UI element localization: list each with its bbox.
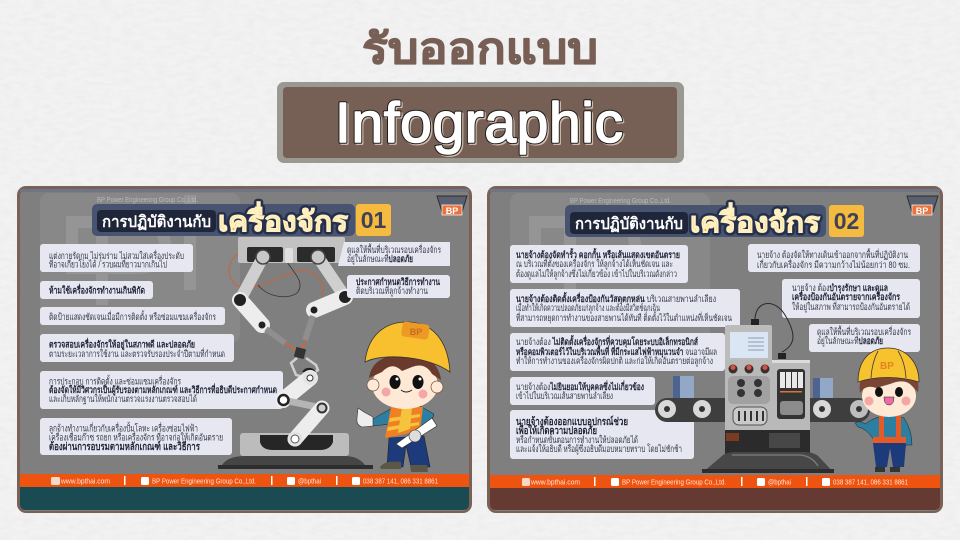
card: safety device design: หรือกำหนดขั้นตอนการทำงานให้ปลอดภัยได้ [516, 432, 638, 445]
card: work area [809, 324, 920, 352]
title bar [565, 202, 864, 238]
card: work method [347, 275, 450, 298]
card: safety device design: และแจ้งให้อธิบดี หรือผู้ซึ่งอธิบดีมอบหมายทราบ โดยไม่ชักช้า [516, 442, 682, 455]
card: electronics [510, 333, 725, 371]
banner: Infographic: Infographic [336, 92, 626, 156]
card: overload [40, 281, 153, 299]
company name: BP Power Engineering Group Co.,Ltd. [97, 197, 198, 204]
card: work area: อยู่ในลักษณะที่ปลอดภัย [817, 334, 883, 347]
card: unauthorised persons: นายจ้างต้องไม่ยินยอมให้บุคคลซึ่งไม่เกี่ยวข้อง [516, 380, 644, 393]
card: installation: การประกอบ การติดตั้ง และซ่อมแซมเครื่องจักร [49, 374, 181, 386]
card: maintenance: เครื่องป้องกันอันตรายจากเครื่องจักร [792, 290, 900, 302]
company name: BP Power Engineering Group Co.,Ltd. [570, 198, 671, 205]
robot arm [218, 237, 373, 469]
footer contact bar 02 [490, 475, 940, 510]
card: unauthorised persons: เข้าไปในบริเวณเส้นสายพานลำเลียง [516, 391, 613, 401]
character: engineer with blueprint: BP [410, 327, 422, 337]
card: maintenance [782, 279, 920, 318]
panel: machine safety 01 [17, 186, 472, 513]
title bar: เครื่องจักร [690, 202, 820, 238]
card: falling material [510, 289, 740, 327]
card: safety device design [510, 410, 694, 459]
logo BP [437, 196, 467, 216]
card: maintenance: นายจ้าง ต้องบำรุงรักษา และดูแล [792, 283, 888, 294]
footer contact bar 02: @bpthai [768, 478, 791, 486]
card: walkway: นายจ้าง ต้องจัดให้ทางเดินเข้าออกจากพื้นที่ปฏิบัติงาน [757, 247, 909, 260]
card: barriers: ต้องดูแลไม่ให้ลูกจ้างซึ่งไม่เกี่ยวข้อง เข้าไปในบริเวณดังกล่าว [516, 267, 677, 280]
footer contact bar 02: 038 387 141, 086 331 8861 [833, 478, 908, 486]
footer contact bar 01: www.bpthai.com [60, 476, 110, 486]
card: signage [40, 307, 225, 325]
title bar: การปฏิบัติงานกับ [102, 213, 211, 231]
card: barriers: นายจ้างต้องจัดทำรั้ว คอกกั้น หรือเส้นแสดงเขตอันตราย [516, 247, 680, 260]
card: installation: ต้องจัดให้มีวิศวกรเป็นผู้รับรองตามหลักเกณฑ์ และวิธีการที่อธิบดีประกาศกำหนด [49, 383, 277, 396]
footer contact bar 02: www.bpthai.com [530, 478, 580, 486]
title bar: 02 [834, 208, 859, 234]
banner: Infographic: Infographic [335, 91, 625, 155]
card: falling material: นายจ้างต้องติดตั้งเครื่องป้องกันวัสดุตกหล่น บริเวณสายพานลำเลียง [516, 291, 716, 305]
logo BP: BP [916, 206, 928, 216]
panel: machine safety 02 [487, 186, 943, 513]
watermark logo [510, 193, 710, 343]
footer contact bar 01 [20, 474, 469, 510]
card: work method: ประกาศกำหนดวิธีการทำงาน [356, 276, 441, 287]
watermark logo [40, 193, 240, 343]
card: training: ต้องผ่านการอบรมตามหลักเกณฑ์ และวิธีการ [49, 440, 200, 453]
title bar: 01 [361, 207, 386, 233]
title bar [92, 201, 391, 237]
card: inspection: ตรวจสอบเครื่องจักรให้อยู่ในสภาพดี และปลอดภัย [49, 338, 195, 350]
card: unauthorised persons [510, 377, 655, 405]
card: barriers: ณ บริเวณที่ตั้งของเครื่องจักร ให้ลูกจ้างได้เห็นชัดเจน และ [516, 256, 673, 270]
card: installation [40, 371, 283, 409]
footer contact bar 02: BP Power Engineering Group Co.,Ltd. [622, 478, 726, 486]
card: work area: อยู่ในลักษณะที่ปลอดภัย [347, 252, 413, 265]
card: clothing [40, 244, 193, 272]
title bar: เครื่องจักร [218, 201, 348, 237]
card: electronics: หรือคอมพิวเตอร์ไว้ในบริเวณพื้นที่ ที่มีกระแสไฟฟ้าหมุนวนจำ จนอาจมีผล [516, 344, 717, 358]
footer contact bar 01: BP Power Engineering Group Co.,Ltd. [152, 476, 256, 486]
title bar: เครื่องจักร [218, 201, 348, 237]
card: safety device design: เพื่อให้เกิดความปลอดภัย [516, 422, 597, 437]
card: work area [338, 242, 450, 266]
footer contact bar 01: 038 387 141, 086 331 8861 [363, 476, 438, 486]
banner: Infographic [277, 82, 684, 163]
character: engineer waving: BP [880, 361, 894, 372]
title bar: เครื่องจักร [690, 202, 820, 238]
card: work area: ดูแลให้พื้นที่บริเวณรอบเครื่องจักร [817, 324, 911, 338]
footer contact bar 01: @bpthai [298, 476, 321, 486]
logo BP [907, 196, 938, 216]
card: signage: ติดป้ายแสดงชัดเจนเมื่อมีการติดตั้ง หรือซ่อมแซมเครื่องจักร [49, 309, 216, 322]
character: engineer with blueprint [357, 321, 450, 472]
logo BP: BP [446, 206, 458, 216]
card: inspection: ตามระยะเวลาการใช้งาน และตรวจรับรองประจำปีตามที่กำหนด [49, 347, 225, 359]
card: work area: ดูแลให้พื้นที่บริเวณรอบเครื่องจักร [347, 242, 441, 256]
card: training: ลูกจ้างทำงานเกี่ยวกับเครื่องปั้มโลหะ เครื่องซ่อมไฟฟ้า [49, 420, 198, 434]
title bar: การปฏิบัติงานกับ [575, 215, 683, 233]
card: work method: ติดบริเวณที่ลูกจ้างทำงาน [356, 284, 429, 297]
card: falling material: เมื่อทำให้เกิดความปลอดภัยแก่ลูกจ้าง และต้องมีสวิตช์ฉุกเฉิน [516, 301, 660, 314]
character: engineer waving [855, 348, 919, 472]
card: electronics: ทำให้การทำงานของเครื่องจักรผิดปกติ และก่อให้เกิดอันตรายต่อลูกจ้าง [516, 354, 713, 367]
banner: Infographic: Infographic [335, 91, 625, 155]
card: electronics: นายจ้างต้อง ไม่ติดตั้งเครื่องจักรที่ควบคุมโดยระบบอิเล็กทรอนิกส์ [516, 334, 698, 348]
card: installation: และเก็บหลักฐานให้พนักงานตรวจแรงงานตรวจสอบได้ [49, 392, 197, 405]
card: inspection [40, 334, 234, 362]
card: walkway: เกี่ยวกับเครื่องจักร มีความกว้างไม่น้อยกว่า 80 ซม. [757, 258, 910, 270]
card: training: เครื่องเชื่อมก๊าซ รถยก หรือเครื่องจักร ที่อาจก่อให้เกิดอันตราย [49, 430, 223, 442]
conveyor machine [655, 304, 870, 473]
card: safety device design: นายจ้างต้องออกแบบอุปกรณ์ช่วย [516, 415, 628, 429]
card: clothing: ที่อาจเกี่ยวโยงได้ / รวบผมที่ยาวมากเกินไป [49, 258, 167, 270]
card: training [40, 418, 232, 455]
heading: รับออกแบบ: รับออกแบบ [362, 25, 598, 72]
card: walkway [748, 244, 920, 272]
card: maintenance: ให้อยู่ในสภาพ ที่สามารถป้องกันอันตรายได้ [792, 300, 910, 313]
card: overload: ห้ามใช้เครื่องจักรทำงานเกินพิกัด [49, 284, 145, 296]
card: falling material: ที่สามารถหยุดการทำงานของสายพานได้ทันที ติดตั้งไว้ในตำแหน่งที่เห็นชัดเจน [516, 310, 733, 324]
card: barriers [510, 245, 688, 283]
card: clothing: แต่งกายรัดกุม ไม่รุ่มร่าม ไม่สวมใส่เครื่องประดับ [49, 249, 184, 262]
